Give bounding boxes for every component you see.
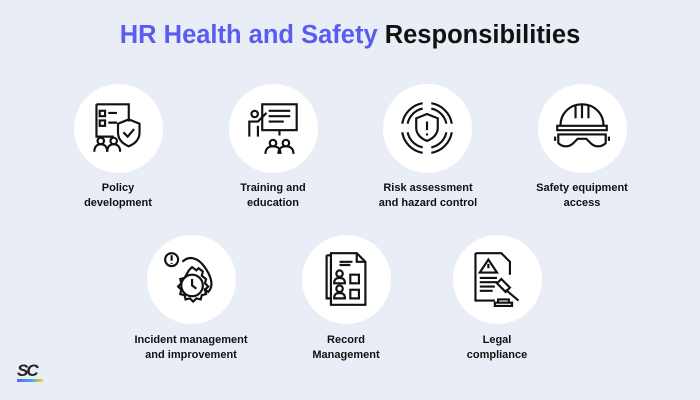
label: training: education [247, 197, 299, 209]
label: risk assessment: and hazard control [379, 197, 477, 209]
label: legal compliance: Legal [483, 334, 511, 346]
label: safety equipment: Safety equipment [536, 182, 628, 194]
label: risk assessment [379, 182, 477, 209]
icon: risk assessment [383, 84, 472, 173]
logo: SC [17, 361, 37, 380]
label: record management: Management [312, 349, 380, 361]
label: incident management [134, 334, 248, 361]
icon: incident management [147, 235, 236, 324]
label: training [240, 182, 306, 209]
label: legal compliance [467, 334, 527, 361]
label: record management [312, 334, 380, 361]
label: training: Training and [240, 182, 306, 194]
label: policy development: Policy [102, 182, 134, 194]
label: incident management: and improvement [145, 349, 237, 361]
label: risk assessment: Risk assessment [383, 182, 473, 194]
label: safety equipment [536, 182, 628, 209]
icon: record management [302, 235, 391, 324]
icon: policy development [74, 84, 163, 173]
label: legal compliance: compliance [467, 349, 527, 361]
icon: safety equipment [538, 84, 627, 173]
icon: training [229, 84, 318, 173]
logo [17, 361, 43, 382]
label: record management: Record [327, 334, 365, 346]
label: safety equipment: access [564, 197, 600, 209]
label: policy development [84, 182, 152, 209]
icon: legal compliance [453, 235, 542, 324]
title: HR Health and Safety Responsibilities [120, 21, 580, 49]
label: incident management: Incident management [134, 334, 248, 346]
label: policy development: development [84, 197, 152, 209]
